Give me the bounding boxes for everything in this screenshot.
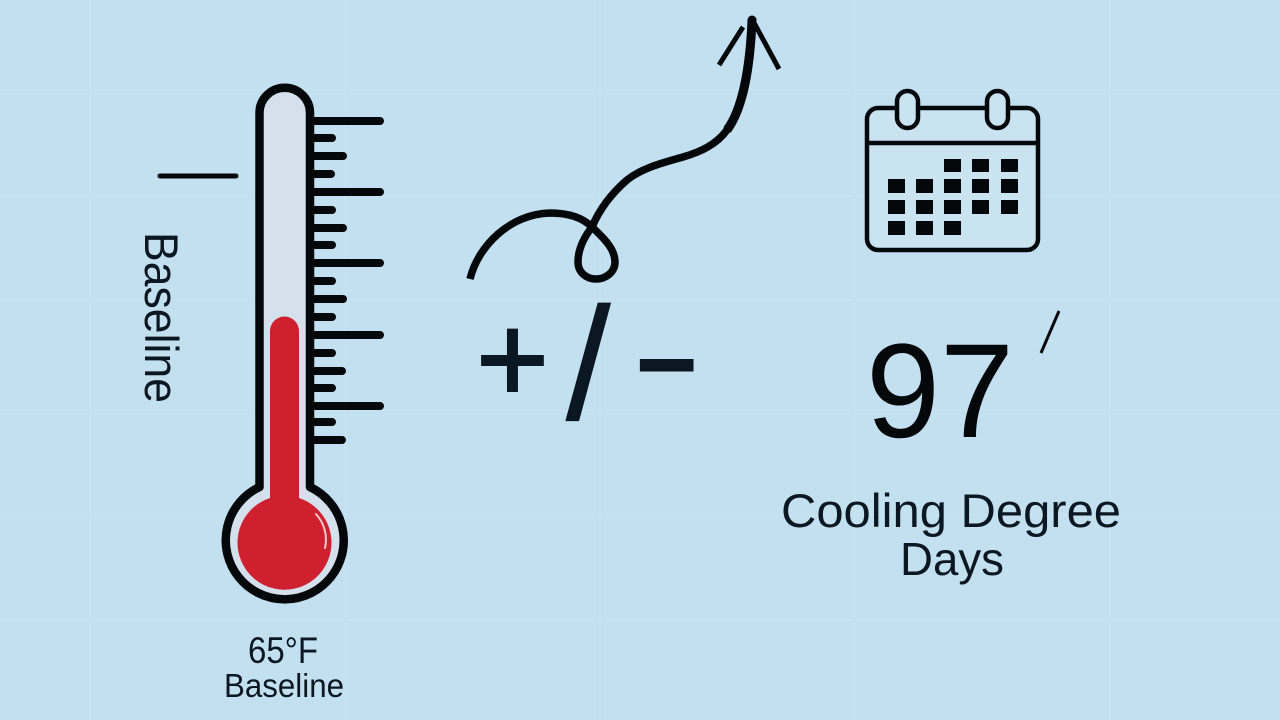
big number 97: 97 <box>866 317 1014 466</box>
minus sign: − <box>636 306 697 423</box>
thermometer <box>226 88 380 599</box>
rotated baseline label: Baseline <box>135 232 188 403</box>
small slash accent <box>1041 311 1059 353</box>
calendar binder rings <box>897 91 1008 128</box>
temperature label: 65°F <box>248 630 318 671</box>
thermometer glass body <box>226 88 344 599</box>
plus sign: + <box>476 290 549 429</box>
cooling degree days label <box>781 484 1121 585</box>
calendar day squares <box>888 159 1018 235</box>
baseline marker line <box>160 174 236 178</box>
cooling degree days label: Cooling Degree <box>781 484 1121 537</box>
calendar icon <box>867 91 1038 250</box>
thermometer tick marks <box>312 121 380 440</box>
thermometer baseline label: Baseline <box>224 667 344 704</box>
red mercury column and bulb <box>237 316 332 590</box>
cooling degree days label: Days <box>900 533 1004 585</box>
curly upward arrow <box>470 16 779 279</box>
calendar frame <box>867 108 1038 250</box>
slash sign: / <box>566 274 611 453</box>
